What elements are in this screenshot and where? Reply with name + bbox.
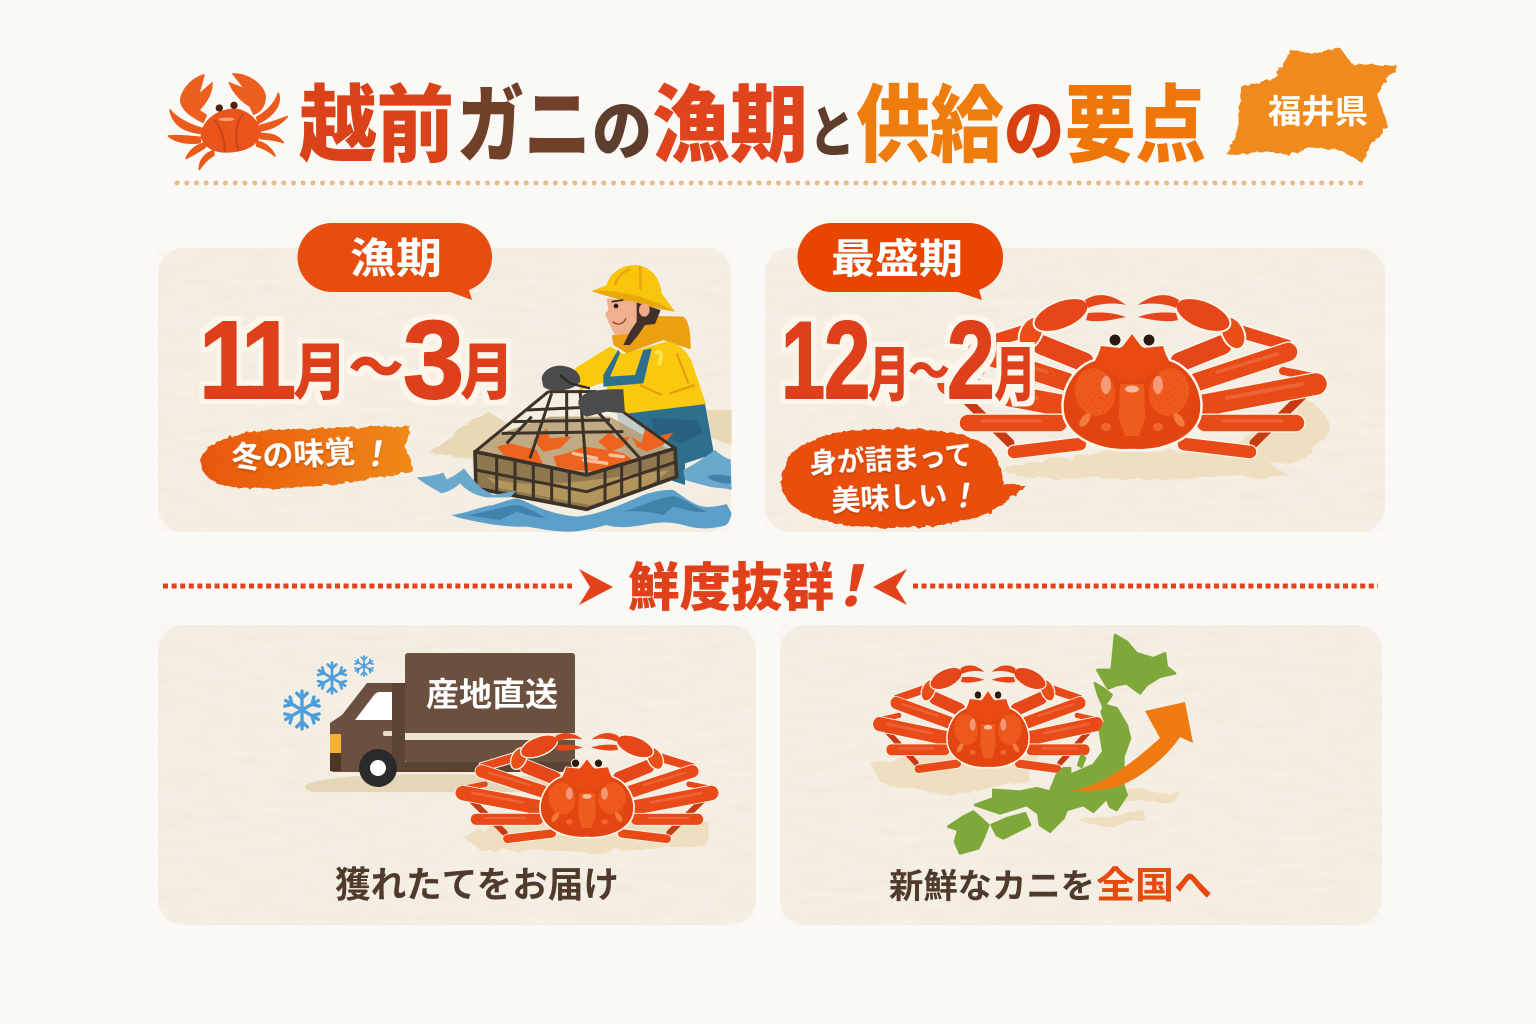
illustration: delivery truck: 産地直送 <box>426 668 558 716</box>
caption: へ <box>1174 855 1212 909</box>
map of Japan <box>948 635 1175 853</box>
illustration: crab <box>461 730 713 839</box>
banner: outstanding freshness with arrows: 鮮度抜群 <box>628 546 834 621</box>
overalls lower <box>617 403 714 485</box>
callout: packed with meat and delicious: 美味しい <box>830 472 948 520</box>
sand <box>430 413 610 463</box>
title: の <box>1004 78 1064 174</box>
caption: 新鮮なカニを <box>889 859 1095 908</box>
heading: fishing season bubble: 漁期 <box>350 225 442 286</box>
date: November to March: 1 <box>199 299 254 422</box>
date: December to February: 2 <box>824 299 871 422</box>
title: と <box>809 88 855 169</box>
title: 供給 <box>856 58 1004 180</box>
gloves <box>542 366 580 391</box>
date: November to March: 月 <box>460 322 514 412</box>
title: 要点 <box>1065 58 1206 180</box>
date: December to February: ～ <box>908 332 950 402</box>
callout: packed with meat and delicious: 身が詰まって <box>808 434 973 482</box>
callout: winter taste: ！ <box>356 425 398 477</box>
crabs in cage <box>497 428 673 472</box>
hat <box>592 265 675 312</box>
illustration: crab <box>878 663 1098 769</box>
panel: nationwide shipping <box>780 625 1382 925</box>
title crab icon <box>168 73 287 169</box>
date: November to March: 1 <box>241 299 296 422</box>
date: December to February: 1 <box>781 299 825 422</box>
title: 越前 <box>299 58 454 180</box>
illustration: snow crab <box>946 291 1318 452</box>
date: November to March <box>199 299 514 422</box>
date: December to February: 月 <box>994 327 1036 414</box>
date: November to March: 3 <box>403 299 464 422</box>
heading: peak season bubble <box>798 223 1003 300</box>
hair <box>623 302 661 345</box>
banner: outstanding freshness with arrows <box>163 542 1378 623</box>
callout: packed with meat and delicious: ！ <box>945 469 985 518</box>
panel: peak season <box>765 223 1385 532</box>
title: 漁期 <box>652 58 808 180</box>
date: December to February <box>781 299 1036 422</box>
arrow <box>1072 702 1193 791</box>
illustration: delivery truck <box>306 653 575 792</box>
title: ガニ <box>457 58 591 180</box>
title <box>299 58 1206 180</box>
callout: packed with meat and delicious <box>781 429 1026 528</box>
sand shadows <box>872 757 1180 827</box>
title: の <box>592 78 652 174</box>
panel: fishing season <box>158 223 732 532</box>
face <box>605 298 637 335</box>
date: November to March: ～ <box>348 321 404 405</box>
illustration: fisherman with crab cage <box>417 265 732 532</box>
straps <box>603 349 652 387</box>
Fukui prefecture map badge <box>1227 48 1398 163</box>
cage frame <box>475 390 677 509</box>
date: December to February: 2 <box>947 299 995 421</box>
banner: outstanding freshness with arrows: ！ <box>818 542 892 623</box>
icon: snowflakes <box>283 656 374 729</box>
cage interior <box>475 390 675 475</box>
caption: 獲れたてをお届け <box>335 856 619 908</box>
heading: fishing season bubble <box>298 223 492 300</box>
date: November to March: 月 <box>293 322 347 412</box>
waves <box>417 468 517 497</box>
coat <box>575 342 706 414</box>
heading: peak season bubble: 最盛期 <box>831 225 963 285</box>
Fukui prefecture map badge: 福井県 <box>1268 85 1368 133</box>
callout: winter taste: 冬の味覚 <box>230 427 356 478</box>
callout: winter taste <box>201 425 414 488</box>
date: December to February: 月 <box>868 327 910 414</box>
panel: direct delivery <box>158 625 756 925</box>
sand shadow under crab <box>1003 400 1330 480</box>
caption: 全国 <box>1096 855 1174 909</box>
hood <box>612 316 691 353</box>
sand shadow under crab <box>462 820 712 852</box>
caption <box>889 855 1212 909</box>
